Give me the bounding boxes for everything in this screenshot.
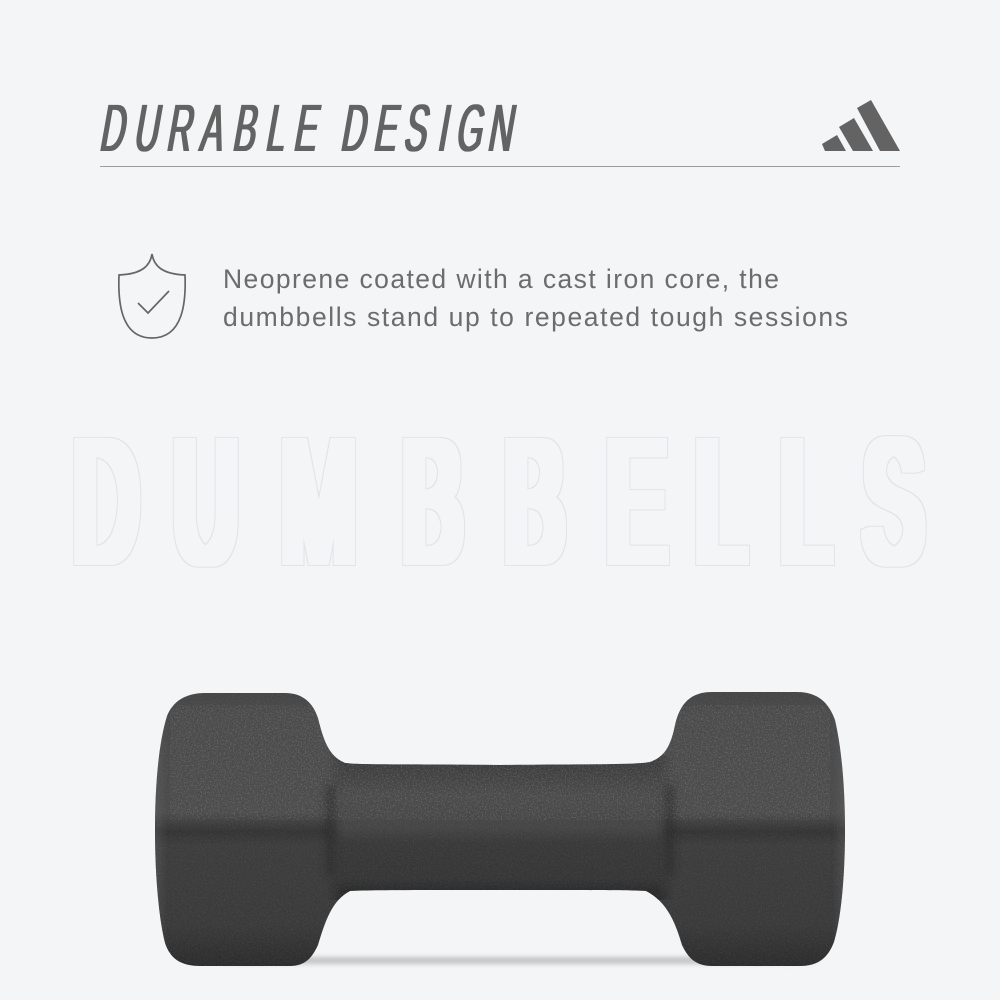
edge shading [155,814,162,919]
ground shadow [185,957,825,964]
upper surface highlight grain [170,705,830,820]
description text: Neoprene coated with a cast iron core, the [223,264,779,294]
icon: shield with check mark [119,254,185,338]
neck shading [326,785,335,875]
dumbbell photo illustration [150,685,850,975]
description text: dumbbells stand up to repeated tough sessions [223,302,848,332]
title: Durable Design: DURABLE DESIGN [96,91,521,166]
infographic canvas [73,100,926,966]
surface grain [150,685,850,970]
dumbbell body [150,685,850,975]
outlined watermark word: Dumbbells: DUMBBELLS [74,404,923,600]
divider under title [100,166,900,167]
description text [223,264,848,332]
icon: three-bar brand logo [822,100,900,151]
